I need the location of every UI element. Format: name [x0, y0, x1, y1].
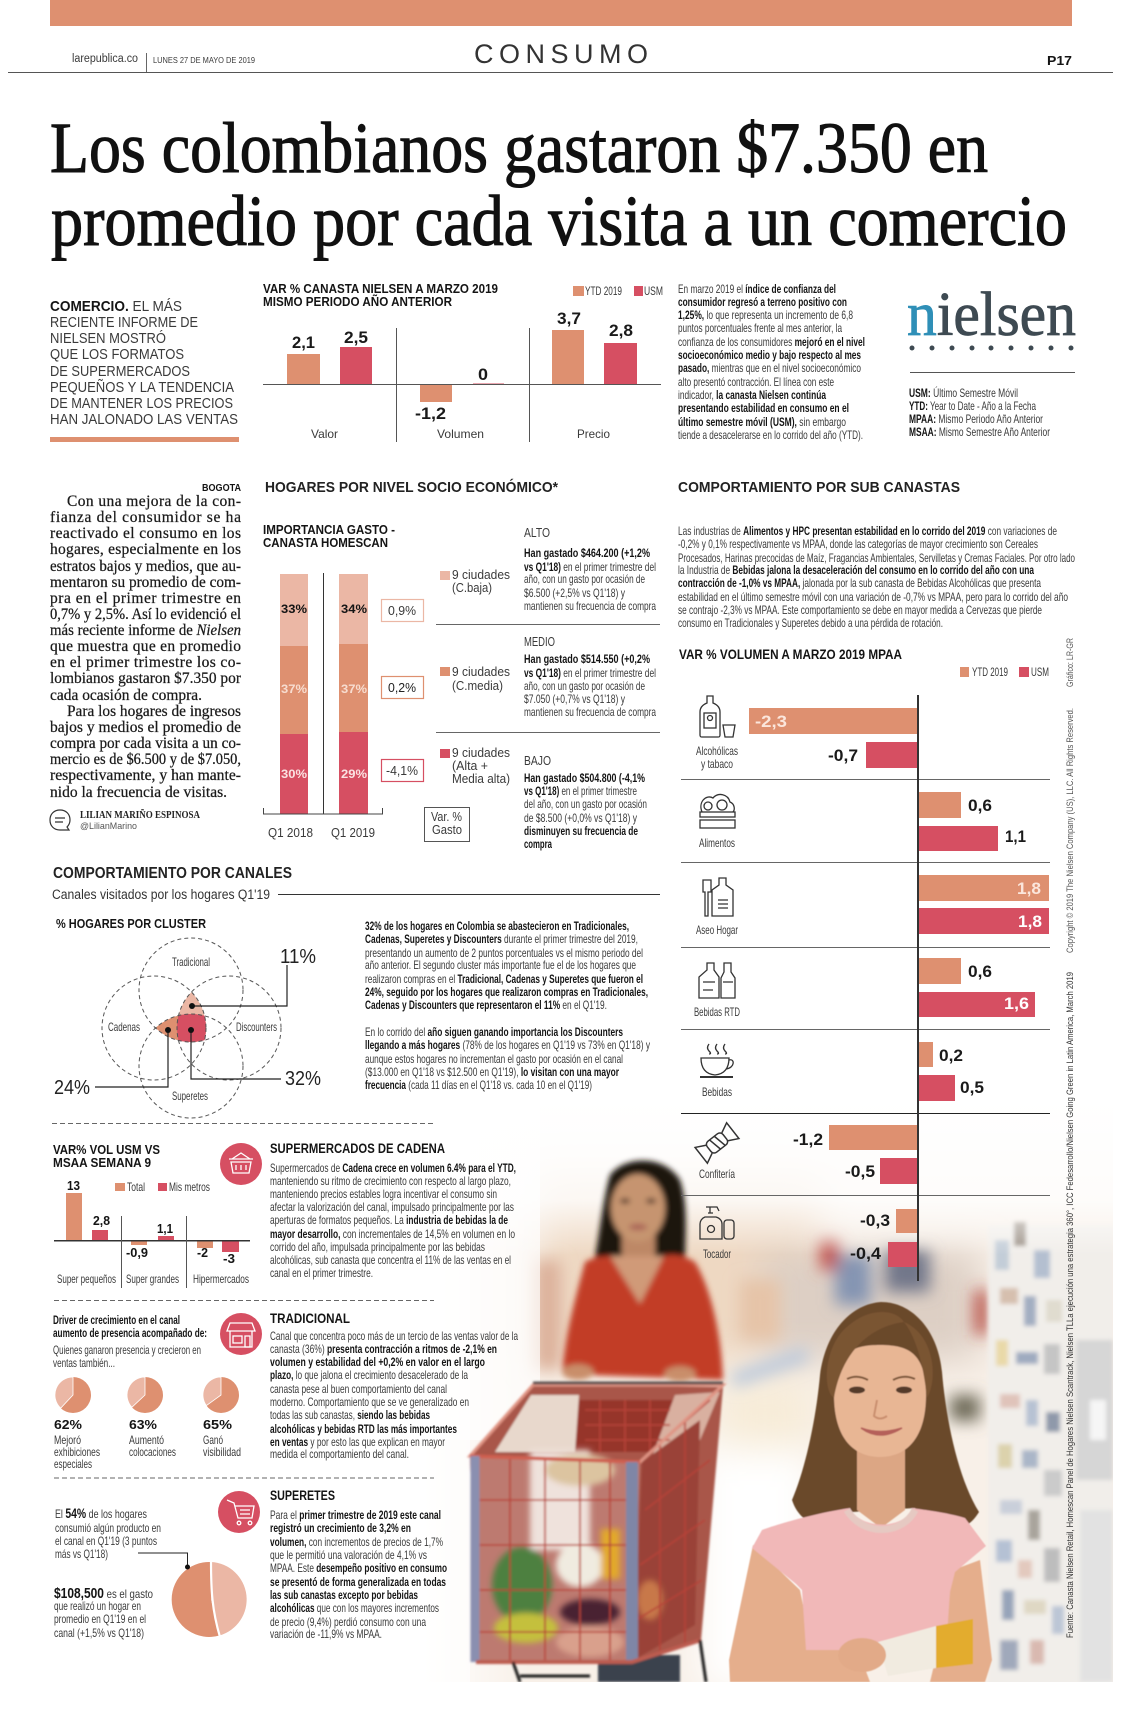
values: 2,8 — [609, 321, 633, 340]
text: canales: 32% de los hogares en Colombia se abastecieron en Tradicionales, — [365, 919, 629, 933]
text: alto — [524, 526, 656, 613]
glossary: MPAA: Mismo Periodo Año Anterior — [909, 412, 1043, 426]
stats: superetes: más vs Q1'18) — [55, 1547, 108, 1561]
text: canales: llegando a más hogares (78% de los hogares en Q1'19 vs 73% en Q1'18) y — [365, 1038, 650, 1052]
venn diagram: % hogares por cluster: Superetes — [172, 1089, 208, 1103]
category: aseo hogar: 1,8 — [1017, 879, 1041, 898]
bar: Q1 2019 — [339, 574, 368, 814]
filled segment: tradicional, cadenas, superetes — [156, 1014, 206, 1042]
pie: 62%: 62% — [54, 1417, 82, 1432]
logo: nielsen: nielsen — [907, 281, 1076, 349]
text: supermercados de cadena — [270, 1141, 516, 1280]
venn diagram: % hogares por cluster — [54, 916, 321, 1118]
photo: supermarket aisle with woman, cart and girl — [466, 1155, 1113, 1682]
bars — [287, 330, 637, 402]
legend: 9 ciudades: (C.baja) — [452, 580, 492, 595]
text: alto: ALTO — [524, 526, 550, 540]
category: tocador: -0,3 — [860, 1211, 890, 1230]
categories: Valor — [311, 427, 338, 441]
chart: var% vol usm vs msaa: Super pequeños — [57, 1272, 116, 1286]
bar: Q1 2019: 34% — [341, 602, 367, 616]
icon: crate of food — [700, 795, 735, 828]
category: confiteria — [695, 1123, 918, 1184]
top colour band — [50, 0, 1072, 26]
text: indice de confianza: pasado, mientras que en el nivel socioeconómico — [678, 361, 861, 375]
category: confiteria: -1,2 — [793, 1130, 823, 1149]
chart: var% vol usm vs msaa: Super grandes — [126, 1272, 179, 1286]
article body: hogares, especialmente en los — [50, 541, 241, 558]
chart: var % volumen por sub canasta: VAR % VOLUMEN A MARZO 2019 MPAA — [679, 647, 902, 662]
text: canales: año anterior. El segundo cluster más importante fue el de los hogares que — [365, 958, 636, 972]
var % boxes: 0,9% — [388, 603, 416, 618]
pie: 65%: visibilidad — [203, 1445, 241, 1459]
bars — [66, 1193, 239, 1252]
lead: comercio: COMERCIO. EL MÁS — [50, 298, 182, 315]
stats: superetes: el canal en Q1'19 (3 puntos — [55, 1534, 157, 1548]
text: indice de confianza: confianza de los consumidores mejoró en el nivel — [678, 335, 865, 349]
text: tradicional: alcohólicas y bebidas RTD las más importantes — [270, 1422, 457, 1436]
category: alimentos: Alimentos — [699, 836, 735, 850]
var % gasto key: Gasto — [432, 823, 462, 837]
text: canales: presentando un aumento de 2 puntos porcentuales vs el mismo periodo del — [365, 946, 643, 960]
category: tocador — [700, 1207, 918, 1267]
category: confiteria: Confitería — [699, 1167, 735, 1181]
driver de crecimiento: Quienes ganaron presencia y crecieron en — [53, 1343, 201, 1357]
bar: Q1 2018 — [280, 574, 308, 814]
text: supermercados de cadena: alcohólicas, sub canasta que concentra el 11% de las ventas en el — [270, 1253, 511, 1267]
text: superetes — [270, 1488, 447, 1641]
venn diagram: % hogares por cluster: 32% — [285, 1068, 321, 1090]
chart: importancia gasto stacked bars: CANASTA HOMESCAN — [263, 535, 388, 550]
article body: Con una mejora de la con- — [67, 493, 241, 510]
icon: comment bubble — [50, 810, 70, 830]
values: 13 — [67, 1178, 80, 1193]
text: superetes: las sub canastas excepto por bebidas — [270, 1588, 418, 1602]
values — [67, 1178, 235, 1266]
heading: comportamiento por canales: Canales visitados por los hogares Q1'19 — [52, 887, 270, 902]
category: aseo hogar: Aseo Hogar — [696, 923, 738, 937]
category: bebidas — [700, 1042, 984, 1101]
icon: toothbrush and mouthwash — [703, 878, 733, 916]
text: supermercados de cadena: afectar la valorización del canal, impulsado principalmente por las — [270, 1200, 514, 1214]
filled segment: tradicional, cadenas, discounters — [179, 992, 206, 1042]
values: -1,2 — [415, 404, 446, 423]
text: supermercados de cadena: SUPERMERCADOS DE CADENA — [270, 1141, 445, 1156]
text: alto: mantienen su frecuencia de compra — [524, 599, 656, 613]
values: 2,8 — [93, 1213, 110, 1228]
text: supermercados de cadena: corrido del año, impulsada principalmente por las bebidas — [270, 1240, 485, 1254]
chart: var% vol usm vs msaa: MSAA SEMANA 9 — [53, 1155, 151, 1170]
glossary: USM: Último Semestre Móvil — [909, 385, 1018, 400]
categories — [311, 427, 610, 441]
photo fades — [420, 1100, 1113, 1682]
text: canales: Cadenas y Discounters que representaron el 11% en el Q1'19. — [365, 998, 607, 1012]
category: bebidas rtd — [694, 958, 1035, 1019]
driver de crecimiento — [53, 1313, 241, 1471]
author byline: @LilianMarino — [80, 821, 137, 832]
photo: woman in red top — [562, 1161, 723, 1382]
legend: USM — [1031, 665, 1049, 679]
text: tradicional: TRADICIONAL — [270, 1311, 350, 1326]
author byline — [50, 809, 200, 832]
text: tradicional: volumen y estabilidad del +0,2% en valor en el largo — [270, 1355, 485, 1369]
author byline: LILIAN MARIÑO ESPINOSA — [80, 809, 200, 821]
text: superetes: volumen, con incrementos de precios de 1,7% — [270, 1535, 443, 1549]
text: canales: ($13.000 en Q1'18 vs $12.500 en Q1'19), lo visitan con una mayor — [365, 1065, 619, 1079]
bar: Q1 2019: 37% — [341, 682, 367, 696]
text: indice de confianza: alto presentó contracción. El línea con este — [678, 375, 834, 389]
category: alcoholicas y tabaco: -2,3 — [755, 712, 787, 731]
text: tradicional: plazo, lo que jalona el crecimiento desacelerado de la — [270, 1368, 468, 1382]
categories: Volumen — [437, 427, 484, 441]
text: supermercados de cadena: Supermercados de Cadena crece en volumen 6.4% para el YTD, — [270, 1161, 516, 1175]
text: supermercados de cadena: manteniendo precios estables logra incentivar el consumo sin — [270, 1187, 497, 1201]
icon: basket — [220, 1143, 262, 1185]
text: medio — [524, 635, 656, 719]
chart: var % canasta nielsen: VAR % CANASTA NIELSEN A MARZO 2019 — [263, 281, 498, 296]
pie: 62%: especiales — [54, 1457, 92, 1471]
pie: 65% — [203, 1377, 241, 1459]
legend: YTD 2019 — [585, 284, 622, 298]
lead: comercio: PEQUEÑOS Y LA TENDENCIA — [50, 379, 234, 396]
var % boxes: 0,2% — [388, 680, 416, 695]
text: alto: Han gastado $464.200 (+1,2% — [524, 546, 650, 560]
chart: var % canasta nielsen: MISMO PERIODO AÑO ANTERIOR — [263, 294, 453, 309]
text: indice de confianza: socioeconómico medio y bajo respecto al mes — [678, 348, 861, 362]
text: tradicional: en ventas y por esto las que explican en mayor — [270, 1435, 445, 1449]
pie: 62%: exhibiciones — [54, 1445, 100, 1459]
var % boxes — [382, 600, 424, 782]
icon: shopping cart — [218, 1491, 260, 1533]
article body: mentaron su promedio de com- — [50, 574, 241, 591]
article body: fianza del consumidor se ha — [50, 509, 241, 526]
var % gasto key: Var. % — [431, 810, 462, 824]
values: 3,7 — [557, 309, 581, 328]
chart: importancia gasto stacked bars: IMPORTANCIA GASTO - — [263, 522, 395, 537]
values: -3 — [223, 1251, 235, 1266]
legend: 9 ciudades — [440, 567, 510, 786]
text: indice de confianza: 1,25%, lo que representa un incremento de 6,8 — [678, 308, 853, 322]
venn diagram: % hogares por cluster: Tradicional — [172, 955, 210, 969]
text: canales: realizaron compras en el Tradicional, Cadenas y Superetes que fueron el — [365, 972, 643, 986]
values: 2,1 — [292, 333, 315, 352]
values — [292, 309, 633, 423]
category: tocador: Tocador — [703, 1247, 731, 1261]
category: confiteria: -0,5 — [845, 1162, 875, 1181]
stats: superetes: canal (+1,5% vs Q1'18) — [54, 1626, 144, 1640]
article body — [50, 483, 242, 801]
stats: superetes — [54, 1505, 247, 1640]
text: canales: frecuencia (cada 11 días en el Q1'18 vs. cada 10 en el Q1'19) — [365, 1078, 592, 1092]
icon: storefront — [220, 1313, 262, 1355]
page header: CONSUMO — [474, 39, 648, 69]
category: alimentos: 0,6 — [968, 796, 992, 815]
text: bajo: BAJO — [524, 754, 551, 768]
article body: pra en el primer trimestre en — [50, 590, 241, 607]
article body: 0,7% y 2,5%. Así lo evidenció el — [50, 606, 241, 623]
text: bajo: de $8.500 (+0,0% vs Q1'18) y — [524, 811, 637, 825]
text: sub canastas: Las industrias de Alimentos y HPC presentan estabilidad en lo corrido del 2019 con variaciones de — [678, 524, 1057, 538]
category: bebidas: Bebidas — [702, 1085, 732, 1099]
venn diagram: % hogares por cluster: % HOGARES POR CLUSTER — [56, 916, 207, 931]
article body: cada ocasión de compra. — [50, 687, 202, 704]
text: alto: $6.500 (+2,5% vs Q1'18) y — [524, 586, 625, 600]
venn diagram: % hogares por cluster: 24% — [54, 1077, 90, 1099]
lead: comercio: NIELSEN MOSTRÓ — [50, 330, 166, 347]
glossary: MSAA: Mismo Semestre Año Anterior — [909, 425, 1050, 439]
legend: USM — [644, 284, 663, 298]
text: medio: $7.050 (+0,7% vs Q1'18) y — [524, 692, 625, 706]
text: bajo — [524, 754, 647, 851]
category: bebidas: 0,5 — [960, 1078, 984, 1097]
text: tradicional: todas las sub canastas, siendo las bebidas — [270, 1408, 430, 1422]
pie: 54% — [172, 1561, 247, 1637]
driver de crecimiento: ventas también... — [53, 1356, 115, 1370]
text: sub canastas — [678, 524, 1075, 630]
category: alcoholicas y tabaco — [696, 696, 918, 771]
category: bebidas: 0,2 — [939, 1046, 963, 1065]
vertical credits: Fuente: Canasta Nielsen Retail, Homescan Panel de Hogares Nielsen Scantrack, Nielsen TLLa ejecución una estrategia 360°, ICC Fedesarrollo/Nielsen Going Green in Latin America, March 2019 — [1065, 972, 1076, 1638]
legend: 9 ciudades: Media alta) — [452, 771, 510, 786]
vertical credits: Copyright © 2019 The Nielsen Company (US), LLC. All Rights Reserved. — [1065, 708, 1076, 953]
article body: BOGOTA — [202, 483, 241, 494]
chart: importancia gasto stacked bars: Q1 2019 — [331, 825, 375, 840]
text: superetes: alcohólicas que con los mayores incrementos — [270, 1601, 439, 1615]
category: tocador: -0,4 — [850, 1244, 882, 1263]
legend: YTD 2019 — [972, 665, 1008, 679]
text: sub canastas: consumo en Tradicionales y Superetes debido a una pérdida de rotación. — [678, 616, 943, 630]
text: indice de confianza — [678, 282, 865, 442]
callout lines — [95, 965, 287, 1087]
article body: lombianos gastaron $7.350 por — [50, 670, 242, 687]
bar: Q1 2018: 30% — [281, 767, 307, 781]
article body: en el primer trimestre los co- — [50, 654, 241, 671]
category: aseo hogar: 1,8 — [1018, 912, 1042, 931]
driver de crecimiento: Driver de crecimiento en el canal — [53, 1313, 180, 1327]
text: bajo: del año, con un gasto por ocasión — [524, 797, 647, 811]
chart: var% vol usm vs msaa: VAR% VOL USM VS — [53, 1142, 160, 1157]
bar: Q1 2018: 37% — [281, 682, 307, 696]
text: tradicional: canasta (36%) presenta contracción a ritmos de -2,1% en — [270, 1342, 497, 1356]
text: indice de confianza: tiende a desacelerarse en lo corrido del año (YTD). — [678, 428, 863, 442]
text: superetes: se presentó de forma generalizada en todas — [270, 1575, 446, 1589]
category: bebidas rtd: 1,6 — [1004, 994, 1029, 1013]
text: medio: vs Q1'18) en el primer trimestre del — [524, 666, 656, 680]
article body: reactivado el consumo en los — [50, 525, 241, 542]
text: tradicional: Canal que concentra poco más de un tercio de las ventas valor de la — [270, 1329, 518, 1343]
text: medio: Han gastado $514.550 (+0,2% — [524, 652, 650, 666]
categories: Precio — [577, 427, 610, 441]
article body: respectivamente, y han mante- — [50, 767, 241, 784]
article body: estratos bajos y medios, que au- — [50, 558, 241, 575]
photo background: blurred aisle — [470, 1181, 1113, 1682]
text: indice de confianza: indicador, la canasta Nielsen continúa — [678, 388, 826, 402]
text: canales — [365, 919, 650, 1092]
text: superetes: SUPERETES — [270, 1488, 335, 1503]
page header: larepublica.co — [72, 53, 138, 65]
chart: importancia gasto stacked bars: Q1 2018 — [268, 825, 313, 840]
pie: 63%: Aumentó — [129, 1433, 164, 1447]
text: tradicional: moderno. Comportamiento que se ve generalizado en — [270, 1395, 469, 1409]
category: aseo hogar — [696, 875, 1049, 937]
pie: 63%: 63% — [129, 1417, 157, 1432]
values: -2 — [197, 1245, 208, 1260]
stats: superetes: promedio en Q1'19 en el — [54, 1612, 146, 1626]
legend: Total — [127, 1180, 145, 1194]
text: canales: 24%, seguido por los hogares que realizaron compras en Tradicionales, — [365, 985, 648, 999]
legend: 9 ciudades: (C.media) — [452, 678, 503, 693]
text: supermercados de cadena: aperturas de formatos pequeños. La industria de bebidas la de — [270, 1213, 508, 1227]
article body: Para los hogares de ingresos — [67, 703, 241, 720]
text: bajo: disminuyen su frecuencia de — [524, 824, 638, 838]
text: medio: mantienen su frecuencia de compra — [524, 705, 656, 719]
lead: comercio: DE SUPERMERCADOS — [50, 363, 190, 380]
category: alcoholicas y tabaco: y tabaco — [701, 757, 733, 771]
text: bajo: compra — [524, 837, 552, 851]
text: canales: aunque estos hogares no incrementan el gasto por ocasión en el canal — [365, 1052, 623, 1066]
bar: Q1 2019: 29% — [341, 767, 367, 781]
text: indice de confianza: puntos porcentuales frente al mes anterior, la — [678, 321, 842, 335]
text: alto: año, con un gasto por ocasión de — [524, 572, 645, 586]
page header — [8, 39, 1113, 73]
values: 1,1 — [157, 1221, 173, 1236]
lead: comercio: QUE LOS FORMATOS — [50, 346, 184, 363]
pie: 63% — [127, 1377, 176, 1459]
text: alto: vs Q1'18) en el primer trimestre del — [524, 560, 656, 574]
lead: comercio — [50, 298, 239, 442]
chart: var% vol usm vs msaa: Hipermercados — [193, 1272, 249, 1286]
text: superetes: Para el primer trimestre de 2019 este canal — [270, 1508, 441, 1522]
text: indice de confianza: En marzo 2019 el índice de confianza del — [678, 282, 836, 296]
glossary — [909, 385, 1050, 439]
legend: 9 ciudades: (Alta + — [452, 758, 488, 773]
text: canales: Cadenas, Superetes y Discounters durante el primer trimestre del 2019, — [365, 932, 638, 946]
text: supermercados de cadena: canal en el primer trimestre. — [270, 1266, 373, 1280]
title: Los colombianos gastaron $7.350 en — [50, 108, 988, 188]
bar: Q1 2018: 33% — [281, 602, 307, 616]
icon: wrapped candy — [695, 1123, 739, 1163]
heading: comportamiento por canales: COMPORTAMIENTO POR CANALES — [53, 865, 292, 882]
var % boxes: -4,1% — [386, 763, 418, 778]
category: alcoholicas y tabaco: Alcohólicas — [696, 744, 738, 758]
chart: var% vol usm vs msaa — [53, 1142, 250, 1288]
text: superetes: MPAA. Este desempeño positivo en consumo — [270, 1561, 447, 1575]
filled segment: all four channels — [177, 1014, 206, 1042]
photo: smiling girl holding a box — [729, 1302, 992, 1682]
category: alimentos — [699, 792, 1026, 851]
category: alimentos: 1,1 — [1005, 827, 1026, 846]
text: medio: año, con un gasto por ocasión de — [524, 679, 645, 693]
venn diagram: % hogares por cluster: Cadenas — [108, 1020, 140, 1034]
page header: P17 — [1047, 53, 1072, 68]
icon: steaming cup — [700, 1044, 733, 1077]
legend — [960, 665, 1049, 679]
lead: comercio: HAN JALONADO LAS VENTAS — [50, 411, 238, 428]
article body: compra por cada visita a un co- — [50, 735, 241, 752]
driver de crecimiento: aumento de presencia acompañado de: — [53, 1326, 207, 1340]
article body: más reciente informe de Nielsen — [50, 622, 241, 639]
text: indice de confianza: presentando estabilidad en consumo en el — [678, 401, 849, 415]
venn diagram: % hogares por cluster: 11% — [280, 946, 316, 968]
heading: hogares por nivel socio economico: HOGARES POR NIVEL SOCIO ECONÓMICO* — [265, 478, 558, 496]
legend: Mis metros — [169, 1180, 210, 1194]
text: tradicional: medida el comportamiento del canal. — [270, 1447, 409, 1461]
text: indice de confianza: consumidor regresó a terreno positivo con — [678, 295, 847, 309]
heading: comportamiento por canales — [52, 865, 660, 902]
text: supermercados de cadena: mayor desarrollo, con incrementales de 14,5% en volumen en lo — [270, 1227, 515, 1241]
text: medio: MEDIO — [524, 635, 555, 649]
page header: LUNES 27 DE MAYO DE 2019 — [153, 56, 256, 65]
heading: comportamiento por sub canastas: COMPORTAMIENTO POR SUB CANASTAS — [678, 479, 960, 496]
category: bebidas rtd: 0,6 — [968, 962, 992, 981]
article body: bajos y medios el promedio de — [50, 719, 241, 736]
chart: var % canasta nielsen — [263, 281, 663, 442]
article body: que muestra que en promedio — [50, 638, 241, 655]
icon: soap dispenser and sponge — [700, 1207, 734, 1239]
category: alcoholicas y tabaco: -0,7 — [828, 746, 858, 765]
stats: superetes: consumió algún producto en — [55, 1521, 161, 1535]
photo: shopping cart with groceries — [470, 1383, 723, 1682]
pie: 62% — [54, 1377, 100, 1471]
pie: 62%: Mejoró — [54, 1433, 81, 1447]
chart: var % volumen por sub canasta — [679, 647, 1050, 1281]
vertical credits: Gráfico: LR-GR — [1065, 638, 1076, 687]
icon: bottle and glass — [700, 696, 735, 737]
lead: comercio: DE MANTENER LOS PRECIOS — [50, 395, 233, 412]
legend — [115, 1180, 210, 1194]
text: supermercados de cadena: manteniendo su ritmo de crecimiento con respecto al largo plazo, — [270, 1174, 511, 1188]
chart: importancia gasto stacked bars — [263, 522, 470, 842]
text: bajo: Han gastado $504.800 (-4,1% — [524, 771, 645, 785]
text: superetes: que le permitió una valoración de 4,1% vs — [270, 1548, 427, 1562]
icon: two bottles — [699, 963, 735, 998]
stats: superetes: El 54% de los hogares — [55, 1505, 147, 1521]
text: indice de confianza: último semestre móvil (USM), sin embargo — [678, 415, 846, 429]
text: canales: En lo corrido del año siguen ganando importancia los Discounters — [365, 1025, 623, 1039]
text: tradicional — [270, 1311, 518, 1461]
venn diagram: % hogares por cluster: Discounters — [236, 1020, 277, 1034]
values: -0,9 — [126, 1245, 148, 1260]
lead: comercio: RECIENTE INFORME DE — [50, 314, 198, 331]
legend: 9 ciudades: 9 ciudades — [452, 745, 510, 760]
legend: 9 ciudades: 9 ciudades — [452, 664, 510, 679]
article body: nido la frecuencia de visitas. — [50, 784, 227, 801]
stats: superetes: que realizó un hogar en — [54, 1599, 141, 1613]
category: bebidas rtd: Bebidas RTD — [694, 1005, 740, 1019]
text: superetes: de precio (9,4%) perdió consumo con una — [270, 1615, 426, 1629]
legend: 9 ciudades: 9 ciudades — [452, 567, 510, 582]
values: 2,5 — [344, 328, 368, 347]
values: 0 — [478, 365, 488, 384]
title — [50, 108, 1067, 261]
glossary: YTD: Year to Date - Año a la Fecha — [909, 399, 1036, 413]
text: superetes: registró un crecimiento de 3,2% en — [270, 1521, 411, 1535]
text: tradicional: canasta pese al buen comportamiento del canal — [270, 1382, 447, 1396]
article body: mercio es de $6.500 y de $7.050, — [50, 751, 241, 768]
var % gasto key — [424, 808, 470, 842]
stats: superetes: $108,500 es el gasto — [54, 1585, 153, 1602]
text: superetes: variación de -11,9% vs MPAA. — [270, 1627, 382, 1641]
pie: 63%: colocaciones — [129, 1445, 176, 1459]
pie: 65%: 65% — [203, 1417, 232, 1432]
legend — [573, 284, 663, 298]
pie: 65%: Ganó — [203, 1433, 223, 1447]
text: bajo: vs Q1'18) en el primer trimestre — [524, 784, 637, 798]
